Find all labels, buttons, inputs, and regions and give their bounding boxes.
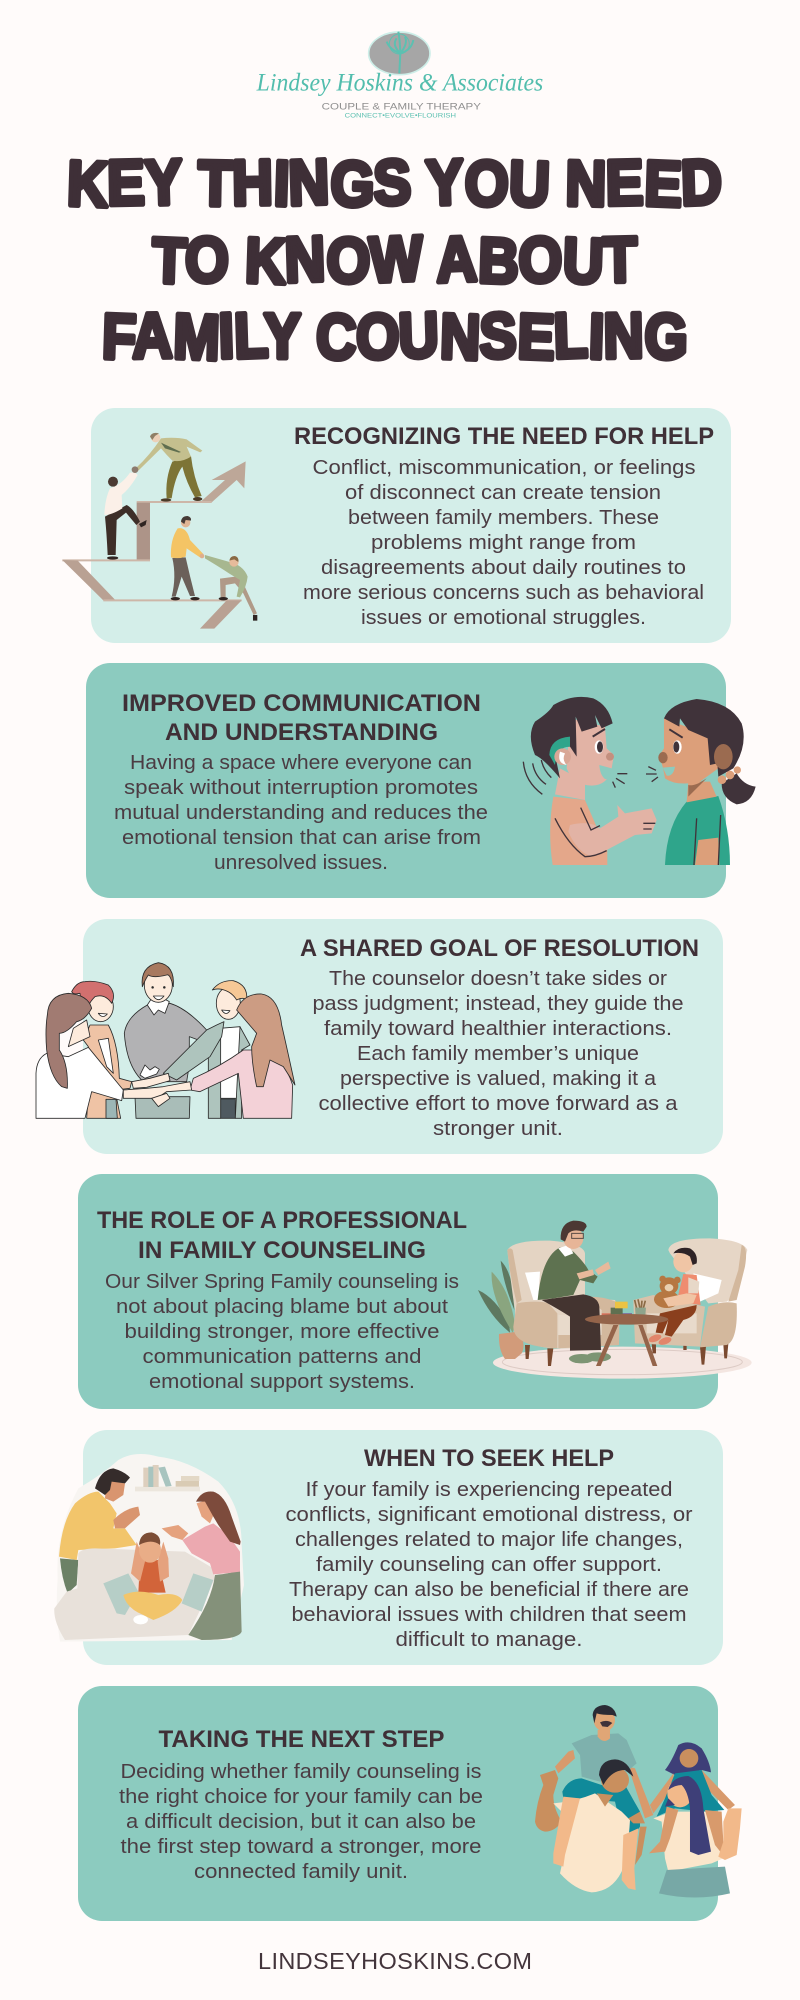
body text: If your family is experiencing repeated bbox=[306, 1479, 672, 1501]
shelf with books bbox=[135, 1487, 200, 1491]
body text: Our Silver Spring Family counseling is bbox=[105, 1271, 459, 1293]
body text: emotional support systems. bbox=[149, 1371, 415, 1393]
right man bbox=[220, 1027, 240, 1098]
heading bbox=[97, 1207, 467, 1264]
body text: conflicts, significant emotional distress, or bbox=[286, 1504, 693, 1526]
body text bbox=[119, 1761, 483, 1883]
illustration: two children talking bbox=[523, 697, 756, 865]
body text bbox=[114, 752, 488, 874]
yellow man bbox=[172, 557, 195, 597]
body text: more serious concerns such as behavioral bbox=[303, 582, 704, 604]
body text: a difficult decision, but it can also be bbox=[126, 1811, 476, 1833]
boy bbox=[550, 797, 607, 865]
heading: RECOGNIZING THE NEED FOR HELP bbox=[294, 423, 714, 450]
boy bbox=[555, 1750, 653, 1818]
left armchair bbox=[525, 1340, 618, 1359]
mother bbox=[653, 1812, 723, 1872]
girl bbox=[722, 773, 756, 804]
body text: Deciding whether family counseling is bbox=[120, 1761, 482, 1783]
body text: between family members. These bbox=[348, 507, 659, 529]
heading: IN FAMILY COUNSELING bbox=[138, 1237, 426, 1264]
body text: Therapy can also be beneficial if there are bbox=[289, 1579, 689, 1601]
title: TO KNOW ABOUT bbox=[151, 222, 638, 297]
panel: when to seek help bbox=[54, 1430, 723, 1665]
child with teddy bear bbox=[656, 1305, 697, 1337]
counselor bbox=[542, 1294, 601, 1351]
body text: Conflict, miscommunication, or feelings bbox=[312, 457, 696, 479]
title: FAMILY COUNSELING bbox=[101, 299, 689, 374]
panel: the role of a professional bbox=[78, 1174, 752, 1409]
body text: building stronger, more effective bbox=[124, 1321, 440, 1343]
father bbox=[535, 1770, 562, 1832]
logo emblem: tree in grey oval bbox=[369, 32, 430, 75]
father bbox=[60, 1558, 78, 1593]
body text bbox=[303, 457, 704, 629]
heading bbox=[122, 690, 481, 746]
panel: a shared goal of resolution bbox=[36, 919, 723, 1154]
body text bbox=[105, 1271, 459, 1393]
panel: taking the next step bbox=[78, 1686, 742, 1921]
child bbox=[133, 1615, 148, 1624]
table with toys bbox=[602, 1313, 615, 1320]
title: KEY THINGS YOU NEED bbox=[66, 146, 723, 221]
body text: behavioral issues with children that seem bbox=[292, 1604, 686, 1626]
body text: mutual understanding and reduces the bbox=[114, 802, 488, 824]
top man bbox=[166, 456, 202, 498]
body text: issues or emotional struggles. bbox=[361, 607, 646, 629]
illustration: five people joining hands bbox=[36, 963, 295, 1118]
hands bbox=[123, 1082, 192, 1098]
logo tagline: COUPLE & FAMILY THERAPY bbox=[322, 101, 482, 111]
illustration: counselor and child in armchairs bbox=[478, 1221, 752, 1379]
body text: connected family unit. bbox=[194, 1861, 408, 1883]
body text: emotional tension that can arise from bbox=[122, 827, 481, 849]
body text bbox=[312, 968, 684, 1140]
center man bbox=[135, 1097, 190, 1118]
footer: website: LINDSEYHOSKINS.COM bbox=[258, 1948, 532, 1974]
body text: speak without interruption promotes bbox=[124, 777, 478, 799]
body text: stronger unit. bbox=[433, 1118, 563, 1140]
illustration: parents carrying children on shoulders bbox=[535, 1705, 742, 1897]
panel: recognizing the need for help bbox=[62, 408, 731, 643]
panel: improved communication and understanding bbox=[86, 663, 756, 898]
body text bbox=[286, 1479, 693, 1651]
body text: collective effort to move forward as a bbox=[318, 1093, 678, 1115]
body text: communication patterns and bbox=[142, 1346, 422, 1368]
title bbox=[66, 146, 723, 374]
body text: disagreements about daily routines to bbox=[321, 557, 686, 579]
illustration: people helping each other up steps bbox=[62, 433, 257, 629]
mother bbox=[188, 1570, 242, 1640]
body text: The counselor doesn’t take sides or bbox=[329, 968, 667, 990]
body text: problems might range from bbox=[371, 532, 636, 554]
body text: challenges related to major life changes, bbox=[295, 1529, 683, 1551]
red haired woman bbox=[83, 1025, 132, 1118]
heading: AND UNDERSTANDING bbox=[165, 719, 438, 746]
heading: THE ROLE OF A PROFESSIONAL bbox=[97, 1207, 467, 1234]
logo: Lindsey Hoskins & Associates bbox=[256, 32, 543, 119]
girl bbox=[665, 1742, 711, 1775]
heading: A SHARED GOAL OF RESOLUTION bbox=[300, 935, 699, 962]
left woman bbox=[36, 1047, 123, 1118]
body text: Each family member’s unique bbox=[357, 1043, 639, 1065]
body text: perspective is valued, making it a bbox=[340, 1068, 657, 1090]
body text: difficult to manage. bbox=[396, 1629, 582, 1651]
body text: unresolved issues. bbox=[214, 852, 388, 874]
green man bbox=[220, 576, 257, 615]
climbing man bbox=[105, 505, 140, 555]
right woman bbox=[190, 1050, 293, 1118]
body text: of disconnect can create tension bbox=[345, 482, 661, 504]
body text: family toward healthier interactions. bbox=[324, 1018, 672, 1040]
body text: family counseling can offer support. bbox=[316, 1554, 662, 1576]
illustration: arguing parents and child on sofa bbox=[54, 1454, 244, 1642]
plant bbox=[478, 1290, 510, 1333]
body text: the first step toward a stronger, more bbox=[120, 1836, 481, 1858]
body text: not about placing blame but about bbox=[116, 1296, 448, 1318]
body text: Having a space where everyone can bbox=[130, 752, 472, 774]
heading: IMPROVED COMMUNICATION bbox=[122, 690, 481, 717]
sofa bbox=[54, 1548, 215, 1640]
body text: the right choice for your family can be bbox=[119, 1786, 483, 1808]
right armchair bbox=[652, 1343, 728, 1365]
heading: WHEN TO SEEK HELP bbox=[364, 1445, 614, 1472]
body text: pass judgment; instead, they guide the bbox=[312, 993, 684, 1015]
heading: TAKING THE NEXT STEP bbox=[158, 1726, 444, 1753]
logo motto: CONNECT•EVOLVE•FLOURISH bbox=[345, 113, 456, 119]
logo script name: Lindsey Hoskins & Associates bbox=[256, 69, 543, 97]
